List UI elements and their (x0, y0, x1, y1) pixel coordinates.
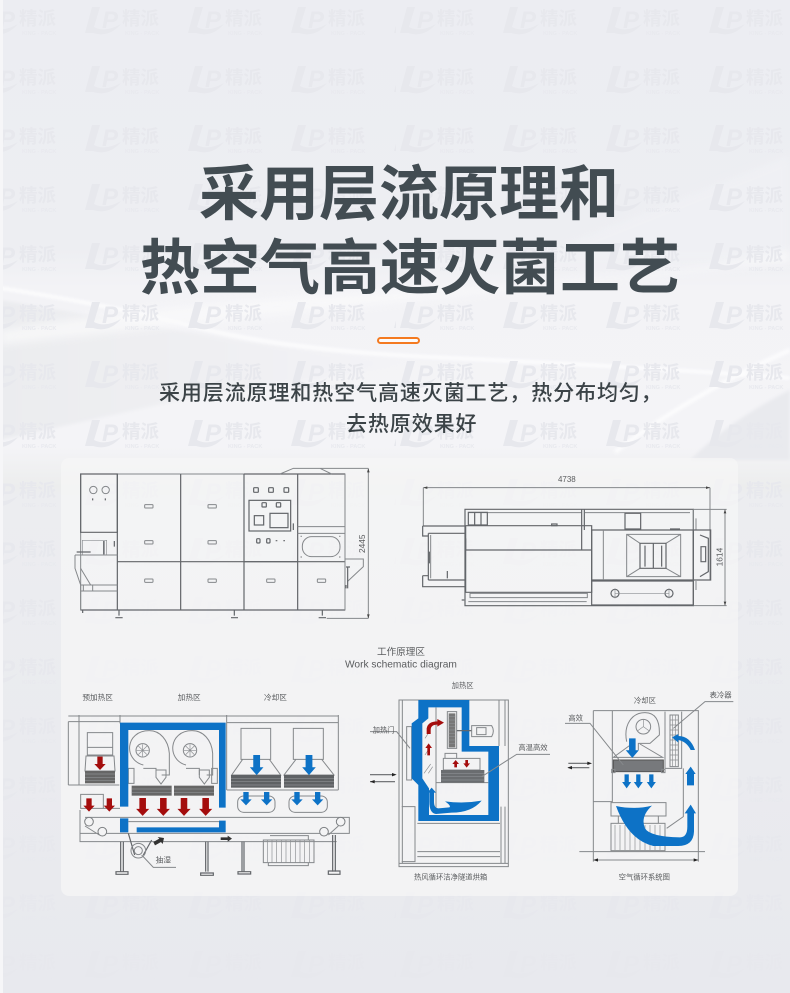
subtitle text (159, 382, 663, 436)
volute fans (128, 731, 217, 784)
zone labels (568, 690, 732, 882)
zone labels: 表冷器 (710, 690, 732, 699)
blue cooling airflow (616, 734, 696, 846)
zone labels: 高效 (568, 713, 584, 722)
zone labels: 加热区 (178, 692, 201, 702)
dimension label: 4738: 4738 (558, 475, 576, 484)
title (140, 161, 680, 302)
zone labels: 冷却区 (264, 692, 287, 702)
red heated-air arrows (425, 719, 470, 768)
subtitle text: 去热原效果好 (346, 413, 477, 436)
zone labels: 热风循环洁净隧道烘箱 (414, 872, 487, 881)
schematic heading (345, 646, 457, 670)
panel: technical drawings (61, 458, 738, 896)
blue air ducts (120, 723, 226, 832)
zone labels: 空气循环系统图 (619, 873, 670, 882)
zone labels: 高温高效 (518, 743, 548, 752)
blue return swoosh (427, 788, 482, 814)
title: 采用层流原理和 (199, 161, 619, 228)
schematic heading: Work schematic diagram (345, 660, 457, 670)
conveyor and stand (80, 810, 349, 875)
subtitle text: 采用层流原理和热空气高速灭菌工艺，热分布均匀， (159, 382, 663, 405)
schematic: tunnel side view with airflow (68, 692, 349, 875)
schematic: cooling zone cross-section (565, 690, 733, 882)
zone labels: 加热门 (373, 726, 395, 735)
accent bar (377, 337, 420, 344)
label: dehumidify: 抽湿 (156, 855, 171, 865)
blue circulation duct (412, 700, 499, 821)
dimension label: 2445: 2445 (357, 534, 367, 553)
blue cooling arrows (240, 755, 323, 805)
dimension label: 1614: 1614 (715, 547, 725, 566)
zone labels: 预加热区 (82, 692, 113, 702)
red heat arrows (83, 757, 212, 816)
schematic: heating zone cross-section (370, 681, 550, 881)
plan view drawing (423, 475, 727, 606)
schematic heading: 工作原理区 (377, 646, 425, 658)
zone labels: 冷却区 (634, 696, 656, 705)
zone labels (373, 681, 548, 881)
zone labels (82, 692, 287, 702)
zone labels: 加热区 (452, 681, 474, 690)
front elevation drawing (75, 468, 370, 618)
title: 热空气高速灭菌工艺 (140, 235, 680, 302)
